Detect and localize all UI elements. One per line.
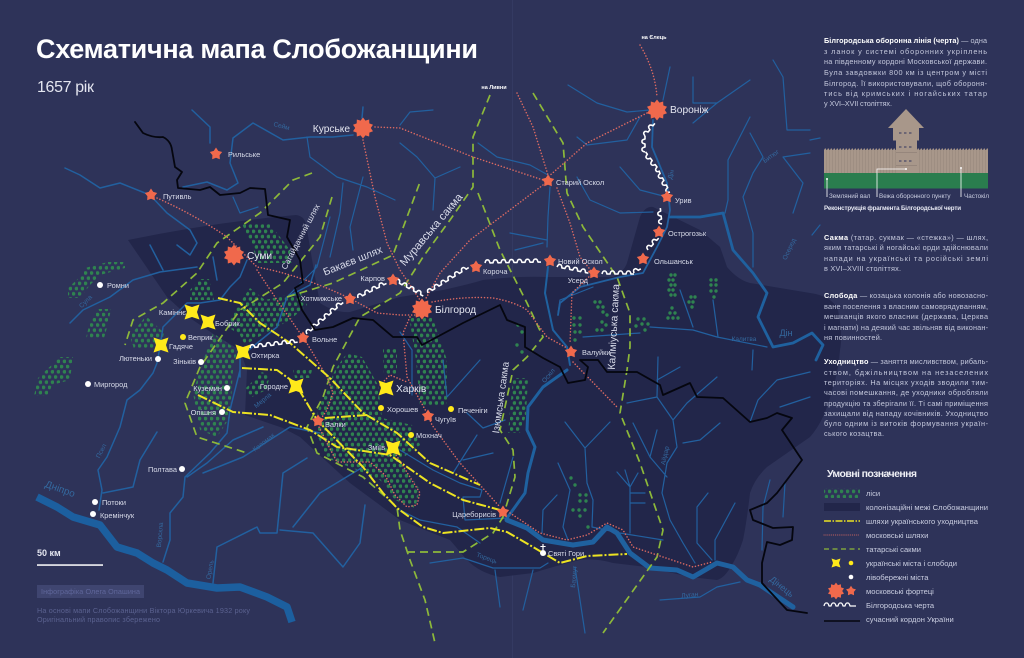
river labels: Луган [681, 591, 699, 600]
city labels: Куземин [193, 384, 222, 393]
text block: ukhodnytstvo: було одним із витоків формування україн- [824, 419, 989, 428]
minor rivers [65, 107, 365, 583]
legend labels: татарські сакми [866, 545, 921, 554]
city labels: Ромни [107, 281, 129, 290]
city labels: Каміннє [159, 308, 186, 317]
Ukrainian trade routes [198, 298, 627, 563]
route names: Бакаєв шлях [322, 244, 385, 279]
illustration: reconstruction of the fortified line: Реконструкція фрагмента Білгородської черти [824, 205, 961, 212]
route names: Сагайдачний шлях [279, 201, 322, 271]
scale bar: 50 км [37, 548, 61, 558]
credits: На основі мапи Слобожанщини Віктора Юркевича 1932 року [37, 606, 250, 615]
river labels: Бахмут [570, 566, 579, 588]
city labels: Вороніж [670, 105, 709, 116]
river labels: Орель [205, 559, 216, 580]
city labels: Острогозьк [668, 229, 707, 238]
route names: на Ливни [481, 85, 507, 91]
river labels: Дінець [768, 574, 796, 599]
legend [824, 468, 988, 624]
city labels: Старий Оскол [556, 178, 604, 187]
river labels: Торець [475, 552, 498, 566]
river labels: Псел [95, 443, 108, 460]
Moscow roads [157, 45, 712, 567]
text block: defensive line: з ланок у системі оборонних укріплень [824, 47, 987, 56]
legend labels: Білгородська черта [866, 601, 935, 610]
route names: Муравська сакма [398, 191, 466, 269]
city labels: Полтава [148, 465, 178, 474]
legend labels: ліси [866, 489, 880, 498]
route names: на Єлець [641, 35, 667, 41]
legend swatches [824, 488, 860, 621]
text block: sloboda: Слобода — козацька колонія або новозасно- [824, 291, 989, 300]
river labels: Мерла [253, 392, 273, 410]
city labels: Миргород [94, 380, 128, 389]
legend labels: колонізаційні межі Слобожанщини [866, 503, 988, 512]
colonisation limits of Sloboda Ukraine [128, 207, 841, 580]
legend labels: українські міста і слободи [866, 559, 957, 568]
city labels: Цареборисів [452, 510, 496, 519]
route names: Ізюмська сакма [491, 361, 512, 434]
city labels: Новий Оскол [558, 257, 603, 266]
route names [279, 35, 667, 434]
river labels: Коломак [252, 432, 276, 453]
city labels: Курське [313, 124, 350, 135]
legend labels: московські шляхи [866, 531, 928, 540]
modern border of Ukraine [135, 122, 807, 613]
river labels: Сула [78, 294, 94, 310]
river labels [43, 120, 798, 600]
credits: Оригінальний правопис збережено [37, 615, 160, 624]
city labels: Печеніги [458, 406, 488, 415]
legend: Умовні позначення [827, 468, 917, 480]
illustration: reconstruction of the fortified line [824, 109, 989, 212]
text block: ukhodnytstvo: захищали від нападу кочівників. Уходництво [824, 409, 988, 418]
legend labels: сучасний кордон України [866, 615, 954, 624]
text block: ukhodnytstvo: ського козацтва. [824, 429, 884, 438]
route names: Калміуська сакма [606, 284, 622, 370]
text block: defensive line: Була завдовжки 800 км із центром у місті [824, 68, 987, 77]
text block: defensive line: на південному кордоні Московської держави. [824, 57, 987, 66]
city labels: Чугуїв [435, 415, 456, 424]
Bilhorod defensive line [250, 122, 670, 348]
text block: sloboda: і магнати) на деякий час звільняв від виконан- [824, 323, 989, 332]
text block: defensive line [824, 36, 988, 108]
text block: ukhodnytstvo [824, 357, 989, 438]
river labels: Битюг [762, 148, 781, 165]
text block: sloboda: мешканців якого власник (держава, Церква [824, 312, 989, 321]
forest groves east [517, 275, 716, 527]
city labels: Короча [483, 267, 508, 276]
river labels: Дін [779, 328, 793, 338]
text block: sloboda [824, 291, 989, 342]
forests [34, 224, 528, 508]
text block: defensive line: тись від кримських і ногайських татар [824, 89, 987, 98]
city labels: Лютеньки [119, 354, 152, 363]
text block: sakma: в XVI–XVIII століттях. [824, 264, 901, 273]
subtitle: year: 1657 рік [37, 79, 95, 96]
Moscow fortresses [145, 100, 673, 517]
river labels: Калитва [732, 336, 757, 343]
text block: ukhodnytstvo: продукцію та зберігали її. Ті самі приміщення [824, 399, 988, 408]
river: Dnipro [37, 497, 292, 622]
text block: sakma: яким татарські й ногайські орди здійснювали [824, 243, 988, 252]
text block: ukhodnytstvo: територіях. На місцях уходів зводили тим- [824, 378, 989, 387]
legend labels: шляхи українського уходництва [866, 517, 979, 526]
legend labels: московські фортеці [866, 587, 934, 596]
icon: watchtower [888, 109, 924, 173]
city labels: Веприк [188, 333, 213, 342]
city labels: Потоки [102, 498, 126, 507]
river labels: Айдар [659, 445, 671, 466]
illustration: reconstruction of the fortified line: Земляний вал [829, 192, 871, 200]
credits: Інфографіка Олега Опашина [41, 587, 140, 596]
city labels: Харків [396, 384, 426, 395]
city labels: Урив [675, 196, 692, 205]
legend labels: лівобережні міста [866, 573, 929, 582]
city labels: Рильське [228, 150, 260, 159]
city labels: Вольне [312, 335, 337, 344]
city labels: Ольшанськ [654, 257, 693, 266]
text block: defensive line: Білгородська оборонна лінія (черта) — одна [824, 36, 988, 45]
legend labels [866, 489, 988, 624]
city labels: Зіньків [173, 357, 196, 366]
city labels: Охтирка [251, 351, 280, 360]
text block: ukhodnytstvo: ством, бджільництвом на незаселених [824, 368, 988, 377]
city labels: Усерд [568, 276, 589, 285]
text block: sakma [824, 233, 988, 273]
city labels: Карпов [360, 274, 385, 283]
city labels: Валуйки [582, 348, 611, 357]
river labels: Ворскла [156, 522, 165, 548]
city labels: Хорошев [387, 405, 418, 414]
city labels: Валки [325, 420, 346, 429]
text block: sakma: напади на українські та російські землі [824, 254, 988, 263]
city labels: Бобрик [215, 319, 240, 328]
city labels: Опішня [191, 408, 216, 417]
title: Схематична мапа Слобожанщини [36, 34, 478, 64]
river labels: Сейм [273, 120, 291, 132]
city labels [94, 105, 709, 558]
text block: sloboda: ня повинностей. [824, 333, 882, 342]
Ukrainian towns and settlements [85, 282, 546, 556]
credits [37, 585, 250, 624]
text block: defensive line: Білгород. Її використовували, щоб обороня- [824, 79, 988, 88]
city labels: Святі Гори [548, 549, 584, 558]
illustration: reconstruction of the fortified line: Частокіл [964, 192, 989, 200]
river: Oskil [507, 370, 567, 518]
text block: sloboda: ване поселення з власним самоврядуванням, [824, 302, 988, 311]
river: Siverskyi Donets [507, 520, 760, 585]
scale bar [37, 548, 103, 566]
Tatar routes [125, 93, 663, 643]
city labels: Путивль [163, 192, 192, 201]
city labels: Зміїв [368, 443, 385, 452]
text block: ukhodnytstvo: часові помешкання, де уходники обробляли [824, 388, 988, 397]
city labels: Городне [260, 382, 288, 391]
city labels: Суми [247, 251, 272, 262]
illustration: reconstruction of the fortified line: Вежа оборонного пункту [879, 192, 951, 200]
text block: sakma: Сакма (татар. сукмак — «стежка») — шлях, [824, 233, 988, 242]
river labels: Дніпро [43, 479, 77, 500]
text block: defensive line: у XVI–XVII століттях. [824, 99, 892, 108]
city labels: Кремінчук [100, 511, 135, 520]
city labels: Мохнач [416, 431, 442, 440]
city labels: Хотмижське [301, 294, 342, 303]
rivers [37, 60, 823, 633]
river labels: Оскіл [540, 367, 557, 385]
city labels: Гадяче [169, 342, 193, 351]
river labels: Осеред [782, 237, 798, 261]
text block: ukhodnytstvo: Уходництво — заняття мисливством, рибаль- [824, 357, 989, 366]
river: Don [670, 213, 823, 360]
river labels: Дін [666, 168, 676, 180]
city labels: Білгород [435, 305, 476, 316]
